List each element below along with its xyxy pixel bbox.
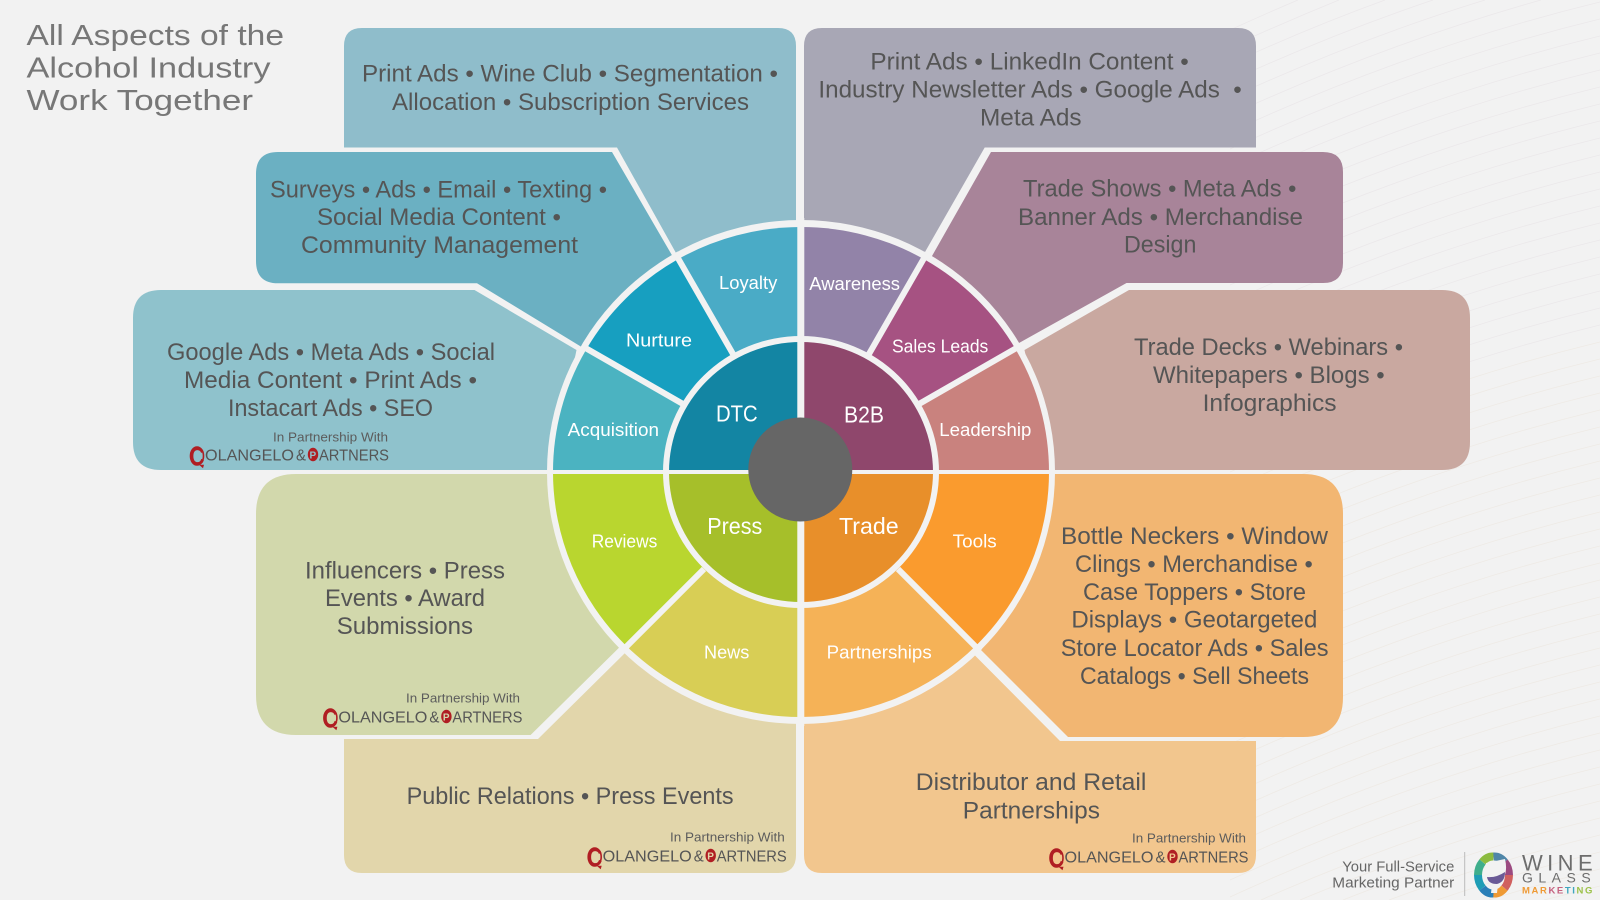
partner credit: news: In Partnership With	[670, 831, 785, 845]
panel: loyalty tactics: Print Ads • Wine Club • Segmentation •	[362, 61, 778, 88]
ring labels: Acquisition	[568, 419, 659, 440]
panel: nurture tactics: Surveys • Ads • Email • Texting •	[270, 176, 607, 204]
partner credit: reviews: P	[443, 712, 450, 724]
panel: tools tactics	[981, 474, 1343, 737]
footer tagline	[1332, 852, 1465, 896]
panel: tools tactics: Catalogs • Sell Sheets	[1080, 663, 1309, 690]
panel: news tactics: Public Relations • Press Events	[407, 783, 734, 810]
panel: leadership tactics: Trade Decks • Webinars •	[1134, 334, 1403, 361]
partner credit: news: C	[587, 844, 602, 872]
panel: tools tactics: Case Toppers • Store	[1083, 579, 1306, 606]
title	[26, 20, 284, 117]
ring labels: Sales Leads	[892, 335, 988, 356]
partner credit: acquisition	[190, 431, 389, 471]
ring labels: Reviews	[592, 530, 657, 551]
partner credit: reviews	[323, 692, 522, 733]
partner credit: news: &	[694, 849, 704, 866]
panel: leadership tactics: Whitepapers • Blogs •	[1153, 362, 1385, 389]
wheel	[546, 218, 1056, 726]
panel: awareness tactics: Industry Newsletter Ads • Google Ads •	[818, 76, 1242, 103]
partner credit: partnerships: OLANGELO	[1064, 850, 1154, 867]
panel: sales leads tactics: Design	[1124, 232, 1196, 259]
title: Alcohol Industry	[26, 52, 271, 84]
wine glass logo: GLASS	[1522, 870, 1596, 886]
partner credit: partnerships: P	[1169, 852, 1176, 864]
panel: partnerships tactics	[804, 654, 1256, 873]
segment: awareness	[801, 227, 925, 472]
panel: reviews tactics: Influencers • Press	[305, 557, 505, 584]
panel: tools tactics: Clings • Merchandise •	[1075, 551, 1313, 578]
partner credit: reviews: ARTNERS	[452, 710, 522, 727]
segment: acquisition	[553, 350, 801, 472]
panel: acquisition tactics: Media Content • Print Ads •	[184, 367, 477, 394]
partner credit: partnerships: ARTNERS	[1178, 850, 1248, 867]
panel: awareness tactics	[804, 28, 1256, 300]
core: Trade	[801, 472, 933, 602]
panel: news tactics	[344, 653, 796, 873]
ring labels: Awareness	[809, 273, 900, 294]
partner credit: news: P	[707, 852, 714, 862]
icon: wine glass ring	[1478, 856, 1509, 894]
panel: partnerships tactics: Distributor and Retail	[916, 769, 1146, 796]
partner credit: partnerships: &	[1156, 850, 1166, 867]
segment: sales leads	[801, 260, 1016, 472]
wine glass logo	[1478, 851, 1597, 897]
partner credit: acquisition: &	[296, 448, 306, 465]
segment: partnerships	[801, 472, 976, 717]
partner credit: reviews: OLANGELO	[338, 710, 427, 727]
panel: reviews tactics: Submissions	[337, 613, 473, 640]
segment: tools	[801, 472, 1049, 645]
panel: reviews tactics: Events • Award	[325, 585, 485, 612]
ring labels	[568, 272, 1031, 662]
core: DTC	[669, 342, 801, 472]
partner credit: reviews: In Partnership With	[406, 692, 520, 706]
core labels: B2B	[844, 401, 884, 427]
wine glass logo: WINE	[1522, 851, 1597, 876]
core labels: Press	[707, 513, 762, 539]
panel: sales leads tactics: Banner Ads • Merchandise	[1018, 204, 1303, 231]
ring labels: Partnerships	[827, 641, 932, 662]
title: All Aspects of the	[26, 20, 284, 52]
partner credit: partnerships: In Partnership With	[1132, 832, 1246, 846]
footer tagline: Your Full-Service	[1342, 859, 1454, 876]
partner credit: acquisition: OLANGELO	[205, 448, 294, 465]
panel: leadership tactics: Infographics	[1203, 390, 1337, 417]
panel: acquisition tactics	[133, 290, 576, 471]
panel: sales leads tactics	[932, 152, 1343, 343]
partner credit: partnerships: C	[1049, 845, 1064, 873]
hub	[748, 418, 852, 522]
wine glass logo: MARKETING	[1522, 886, 1594, 897]
panel: tools tactics: Store Locator Ads • Sales	[1061, 635, 1329, 662]
partner credit: reviews: &	[429, 710, 440, 727]
partner credit: news: ARTNERS	[717, 849, 787, 866]
panel: awareness tactics: Print Ads • LinkedIn Content •	[870, 48, 1189, 75]
panel: awareness tactics: Meta Ads	[980, 104, 1082, 131]
partner credit: acquisition: C	[190, 443, 204, 471]
panel: loyalty tactics: Allocation • Subscription Services	[392, 89, 749, 116]
ring labels: Leadership	[939, 419, 1031, 440]
panel: tools tactics: Displays • Geotargeted	[1071, 607, 1317, 634]
segment: leadership	[801, 350, 1049, 472]
footer tagline: Marketing Partner	[1332, 874, 1454, 891]
segment: loyalty	[677, 227, 801, 472]
partner credit: partnerships	[1049, 832, 1248, 873]
panel: acquisition tactics: Google Ads • Meta Ads • Social	[167, 339, 495, 366]
core: Press	[669, 472, 801, 602]
panel: nurture tactics: Community Management	[301, 232, 578, 259]
ring labels: News	[704, 641, 749, 662]
ring labels: Tools	[953, 530, 997, 551]
partner credit: reviews: C	[323, 705, 338, 733]
title: Work Together	[26, 85, 253, 117]
panel: nurture tactics: Social Media Content •	[317, 204, 561, 231]
core labels: DTC	[716, 401, 758, 427]
core labels: Trade	[839, 513, 899, 539]
partner credit: news	[587, 831, 787, 872]
ring labels: Loyalty	[719, 272, 778, 293]
core: B2B	[801, 342, 933, 472]
segment: nurture	[586, 260, 801, 472]
panel: loyalty tactics	[344, 28, 796, 300]
partner credit: acquisition: ARTNERS	[319, 448, 389, 465]
ring labels: Nurture	[626, 330, 692, 351]
partner credit: news: OLANGELO	[603, 849, 692, 866]
partner credit: acquisition: In Partnership With	[273, 431, 388, 445]
segment: reviews	[553, 472, 801, 645]
panel: nurture tactics	[256, 152, 673, 347]
core labels	[707, 401, 899, 539]
panel: reviews tactics	[256, 474, 620, 735]
panel: leadership tactics	[1024, 290, 1470, 470]
partner credit: acquisition: P	[310, 450, 316, 462]
panel: sales leads tactics: Trade Shows • Meta Ads •	[1023, 176, 1296, 203]
segment: news	[626, 472, 801, 717]
panel: tools tactics: Bottle Neckers • Window	[1061, 523, 1328, 550]
panel: partnerships tactics: Partnerships	[963, 797, 1100, 824]
panel: acquisition tactics: Instacart Ads • SEO	[228, 395, 433, 422]
